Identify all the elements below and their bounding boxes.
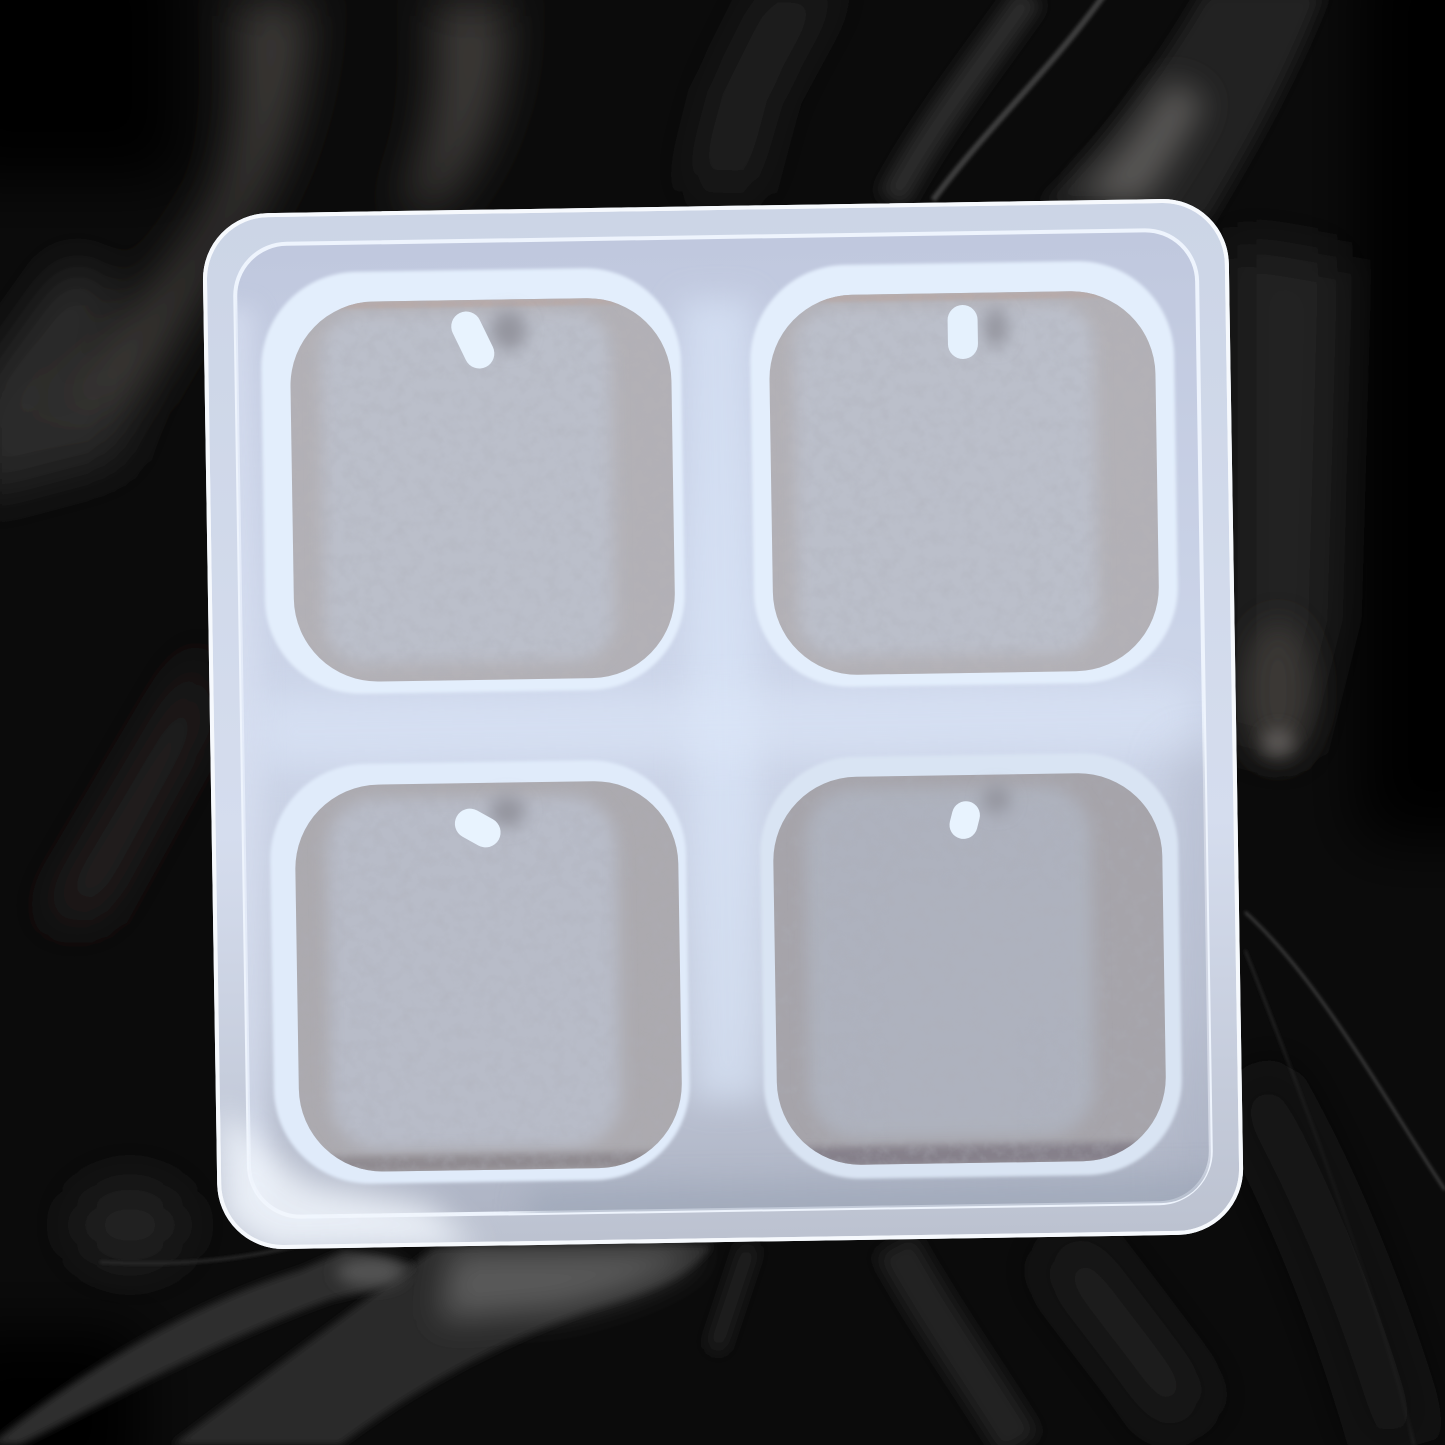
hanging peg — [446, 306, 499, 374]
cavity: bottom right — [759, 752, 1183, 1180]
peg shadow — [489, 795, 526, 828]
hanging peg — [947, 798, 983, 842]
fabric folds: lower right — [715, 912, 1445, 1445]
cavity: top left — [260, 267, 686, 695]
cavity: bottom left — [269, 759, 691, 1185]
cavity: top right — [749, 260, 1179, 688]
re-draw outer edge line — [204, 200, 1242, 1248]
tray surface shading — [213, 292, 1248, 1268]
cavity rim — [759, 752, 1183, 1180]
cavity floor — [772, 771, 1168, 1168]
mold outer edge and inner step — [204, 200, 1248, 1268]
cavity rim — [269, 759, 691, 1185]
cavity rim — [749, 260, 1179, 688]
cavity floor — [289, 296, 677, 684]
fabric folds: top centre streaks — [892, 0, 1104, 200]
silicone mold tray — [204, 200, 1248, 1268]
hanging peg — [947, 305, 978, 359]
bottom-left white highlight — [220, 1112, 473, 1245]
fabric fold: bright band upper right — [1040, 0, 1325, 225]
fabric folds: right side sheen — [1230, 240, 1345, 760]
fabric folds: lower left — [0, 1179, 712, 1445]
peg shadow — [983, 307, 1008, 348]
peg shadow — [982, 785, 1011, 814]
cavity rim — [260, 267, 686, 695]
cavity floor — [767, 289, 1161, 677]
peg shadow — [490, 310, 527, 351]
fabric folds: top left sheen — [0, 0, 840, 920]
cavity floor — [294, 779, 684, 1173]
hanging peg — [449, 803, 506, 853]
